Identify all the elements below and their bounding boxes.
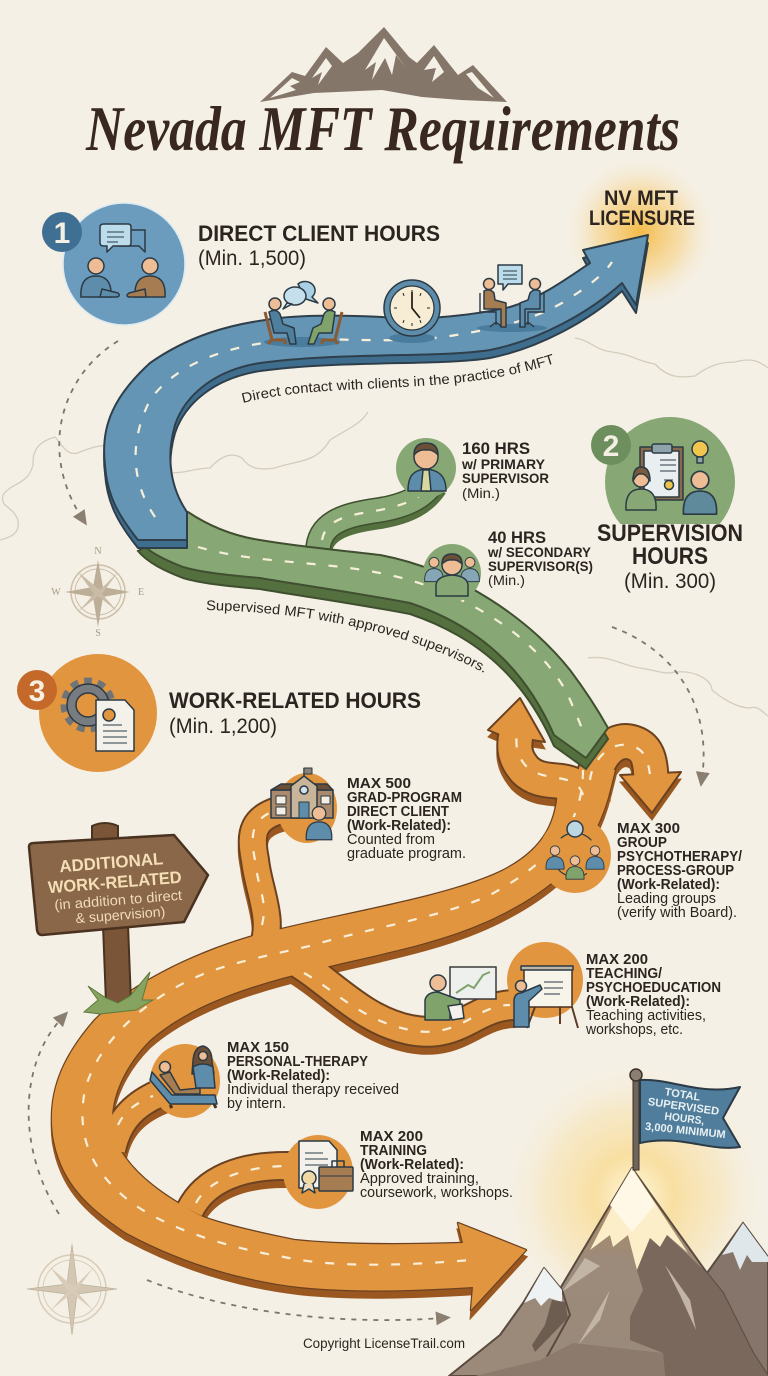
icon: lightbulb [692, 441, 708, 463]
primary supervisor text: w/ PRIMARY [461, 456, 546, 472]
compass rose top [51, 546, 144, 639]
heading: direct client hours: DIRECT CLIENT HOURS [198, 221, 440, 246]
training text: Approved training, [360, 1171, 479, 1187]
foreground slope [475, 1343, 665, 1376]
orange road system [52, 698, 681, 1317]
summit flag: TOTAL [664, 1086, 701, 1104]
training text: (Work-Related): [360, 1157, 464, 1173]
badge 3: 3 [29, 675, 45, 708]
secondary supervisor text: w/ SECONDARY [487, 544, 592, 560]
therapy text: (Work-Related): [227, 1068, 330, 1084]
licensure label [589, 187, 695, 230]
flag pole [633, 1078, 639, 1170]
icon: two people talking [81, 258, 165, 297]
badge 1 [42, 212, 82, 252]
teaching text [585, 952, 721, 1038]
copyright: Copyright LicenseTrail.com [303, 1336, 465, 1351]
learner with chart icon [425, 967, 496, 1020]
summit flag: 3,000 MINIMUM [644, 1121, 726, 1141]
road surface [52, 728, 651, 1310]
heading: work related hours: (Min. 1,200) [169, 715, 277, 738]
primary supervisor text: (Min.) [462, 485, 500, 501]
green road [138, 480, 608, 769]
icon: supervisor and intern [626, 467, 717, 514]
teaching text: Teaching activities, [586, 1008, 706, 1024]
group therapy text: (Work-Related): [617, 877, 720, 893]
grad program text: (Work-Related): [347, 818, 451, 834]
therapy text: Individual therapy received [227, 1082, 399, 1098]
icon: clipboard [640, 444, 683, 500]
signpost: ADDITIONAL [59, 849, 164, 876]
grad program text: GRAD-PROGRAM [347, 790, 462, 806]
heading: supervision hours: SUPERVISION [597, 520, 743, 547]
training icon [283, 1135, 353, 1209]
heading: supervision hours [597, 520, 743, 593]
decorative dashed route arrows [29, 341, 704, 1320]
teaching icon [507, 942, 583, 1028]
road outline [52, 728, 651, 1310]
blue road [104, 235, 648, 548]
icon: clients seated with chat [264, 281, 342, 347]
grad program text: DIRECT CLIENT [347, 804, 449, 820]
therapy text: by intern. [227, 1096, 286, 1112]
signpost [29, 823, 208, 1014]
secondary supervisor text [487, 529, 593, 588]
group therapy text: Leading groups [617, 891, 716, 907]
green branch to primary supervisor [318, 480, 435, 562]
signpost pole [92, 823, 131, 1003]
signpost: WORK-RELATED [47, 868, 182, 897]
training text: TRAINING [360, 1143, 427, 1159]
heading: direct client hours [198, 221, 440, 270]
compass rose top: N [94, 546, 102, 557]
main peak [510, 1168, 768, 1376]
summit flag [630, 1069, 740, 1170]
summit mountains [449, 1168, 768, 1376]
group therapy text: PSYCHOTHERAPY/ [617, 849, 742, 865]
primary supervisor text: 160 HRS [462, 440, 530, 458]
fork arrowheads [488, 698, 681, 813]
primary supervisor text [461, 440, 549, 501]
training text: MAX 200 [360, 1129, 423, 1145]
summit glow [499, 1060, 768, 1330]
step 1 icon panel [42, 203, 185, 325]
map contour lines [0, 338, 768, 716]
icon: counselling pair [477, 265, 547, 332]
header mountain [260, 27, 507, 102]
right mountain [690, 1223, 768, 1376]
licensure glow [562, 154, 718, 310]
licensure label: NV MFT [604, 187, 678, 210]
group therapy text: (verify with Board). [617, 905, 737, 921]
secondary supervisor text: 40 HRS [488, 529, 546, 547]
compass rose top: E [138, 587, 144, 598]
road centre dashes [82, 728, 650, 1265]
secondary supervisor text: SUPERVISOR(S) [488, 558, 593, 574]
grad program text: graduate program. [347, 846, 466, 862]
secondary supervisor text: (Min.) [488, 572, 525, 588]
therapy text: PERSONAL-THERAPY [227, 1054, 368, 1070]
icon: speech bubbles [100, 224, 145, 252]
heading: work related hours [169, 688, 421, 738]
sign board [29, 835, 208, 935]
group therapy text [617, 821, 742, 921]
secondary supervisor icon [423, 544, 481, 602]
compass rose top: S [95, 628, 101, 639]
step 2 icon panel [591, 417, 735, 547]
primary supervisor icon [396, 438, 456, 498]
group therapy text: PROCESS-GROUP [617, 863, 734, 879]
teaching text: PSYCHOEDUCATION [586, 980, 721, 996]
heading: supervision hours: (Min. 300) [624, 570, 716, 593]
therapy text [227, 1040, 399, 1112]
badge 2: 2 [603, 430, 619, 463]
road shadow [52, 705, 681, 1317]
icon: document [96, 700, 134, 751]
primary supervisor text: SUPERVISOR [462, 470, 549, 486]
caption: supervised: Supervised MFT with approved supervisors. [206, 600, 484, 672]
training text: coursework, workshops. [360, 1185, 513, 1201]
heading: supervision hours: HOURS [632, 543, 708, 570]
teaching text: workshops, etc. [585, 1022, 683, 1038]
step 3 icon panel [17, 654, 157, 772]
summit flag: HOURS, [664, 1111, 705, 1127]
therapy couch icon [150, 1044, 220, 1118]
signpost: & supervision) [75, 903, 166, 926]
small left mountain [449, 1268, 570, 1376]
icon: gear [66, 683, 110, 727]
licensure label: LICENSURE [589, 207, 695, 230]
signpost: (in addition to direct [54, 887, 183, 913]
compass rose bottom [27, 1244, 117, 1335]
group therapy text: MAX 300 [617, 821, 680, 837]
grad program text: MAX 500 [347, 776, 411, 792]
grad program icon [271, 768, 337, 843]
heading: work related hours: WORK-RELATED HOURS [169, 688, 421, 713]
badge 1: 1 [54, 217, 70, 250]
grass [84, 972, 153, 1014]
icon: clock [384, 280, 440, 343]
heading: direct client hours: (Min. 1,500) [198, 247, 306, 270]
teaching text: TEACHING/ [586, 966, 662, 982]
compass rose top: W [51, 587, 61, 598]
teaching text: MAX 200 [586, 952, 648, 968]
teaching text: (Work-Related): [586, 994, 690, 1010]
grad program text [347, 776, 466, 862]
summit flag: SUPERVISED [647, 1096, 720, 1118]
badge 2 [591, 425, 631, 465]
group therapy icon [539, 817, 611, 893]
flag cloth [640, 1080, 740, 1148]
therapy text: MAX 150 [227, 1040, 289, 1056]
group therapy text: GROUP [617, 835, 667, 851]
training text [360, 1129, 513, 1201]
grad program text: Counted from [347, 832, 435, 848]
